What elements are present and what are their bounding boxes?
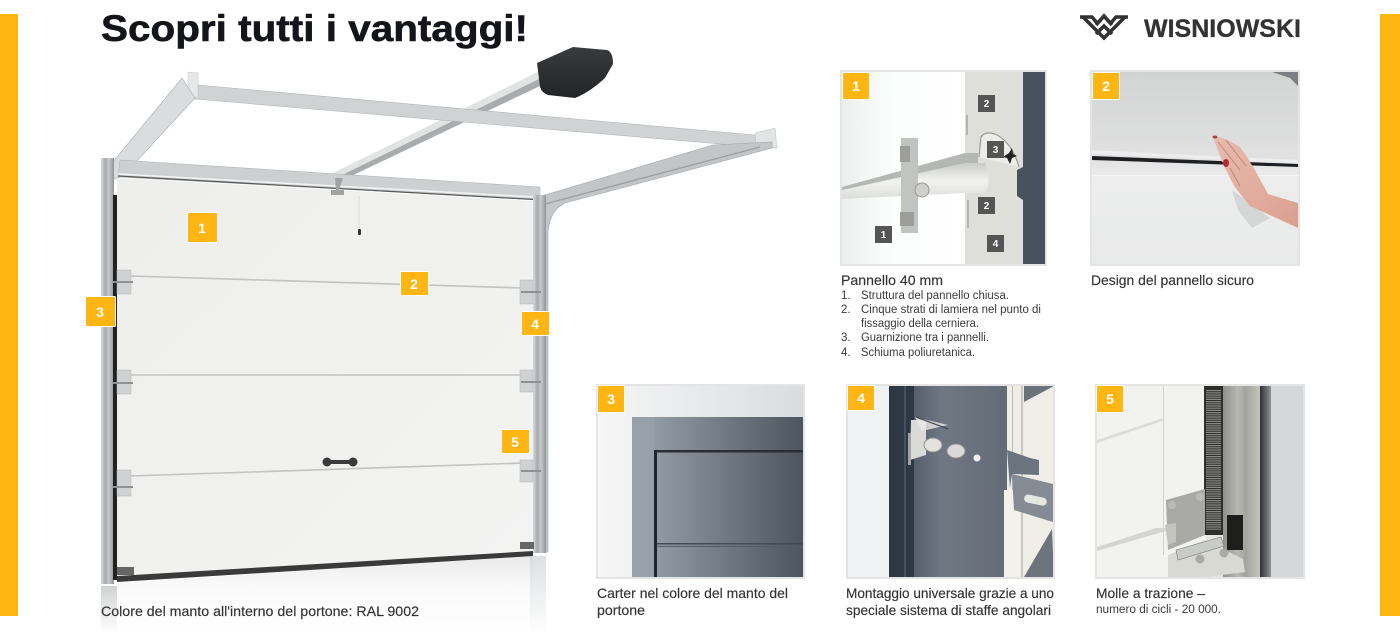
panel 4: universal mounting	[846, 384, 1055, 618]
badge 4 on door	[522, 312, 550, 336]
badge 5 on door	[502, 430, 530, 454]
caption	[1096, 585, 1221, 616]
label markers: 4	[993, 239, 999, 250]
badge 2 on door	[400, 272, 428, 296]
photo frame 1	[840, 70, 1047, 266]
numbered list: Cinque strati di lamiera nel punto di	[861, 304, 1041, 316]
left jamb	[101, 158, 114, 584]
numbered list: 4.	[841, 347, 851, 359]
panel 1: panel cross-section	[840, 70, 1047, 359]
title: Scopri tutti i vantaggi!	[101, 8, 528, 49]
panel 3: colour-matched cover	[596, 384, 805, 618]
caption: portone	[597, 602, 645, 618]
carriage	[331, 178, 344, 195]
badge 4: 4	[857, 390, 865, 406]
heading: Pannello 40 mm	[841, 272, 943, 288]
rear cross beam	[188, 72, 777, 148]
badge 1	[842, 72, 870, 100]
left horizontal track	[112, 78, 195, 180]
numbered list: fissaggio della cerniera.	[861, 318, 979, 330]
badge 4 on door: 4	[531, 316, 539, 332]
label markers: 2	[984, 99, 990, 110]
photo frame 4	[846, 384, 1055, 579]
numbered list	[841, 290, 1041, 359]
numbered list: 3.	[841, 332, 851, 344]
bracket photo	[847, 385, 1054, 577]
label markers: 1	[881, 230, 887, 241]
hinges	[117, 270, 533, 496]
spring photo	[1096, 385, 1305, 577]
label markers	[875, 95, 1004, 252]
right horizontal track	[538, 142, 772, 552]
garage door illustration	[101, 47, 777, 634]
badge 1: 1	[852, 78, 860, 94]
icon: W crown mark	[1080, 16, 1128, 38]
dark left seal	[113, 195, 117, 580]
badge 3 on door	[86, 296, 116, 326]
right accent bar	[1380, 14, 1400, 616]
badge 5 on door: 5	[511, 434, 519, 450]
hinge pins	[113, 281, 541, 488]
numbered list: 1.	[841, 290, 851, 302]
numbered list: Struttura del pannello chiusa.	[861, 290, 1009, 302]
caption: Montaggio universale grazie a uno	[846, 585, 1054, 601]
header frame	[118, 160, 540, 200]
badge 2	[1092, 72, 1120, 100]
badge 3 on door: 3	[96, 304, 104, 320]
door leaf	[117, 178, 533, 576]
badge 1 on door: 1	[198, 220, 206, 236]
badge 3	[598, 386, 624, 412]
badge 5	[1096, 386, 1124, 412]
caption: speciale sistema di staffe angolari	[846, 602, 1051, 618]
right jamb	[533, 195, 546, 553]
corner stops	[117, 542, 534, 575]
badge 3: 3	[607, 391, 615, 407]
badge 1 on door	[188, 212, 218, 242]
caption: numero di cicli - 20 000.	[1096, 604, 1221, 616]
numbered list: Schiuma poliuretanica.	[861, 347, 975, 359]
floor reflection	[101, 556, 546, 634]
logo: Wisniowski	[1080, 15, 1301, 43]
badge 2: 2	[1102, 78, 1110, 94]
door caption: Colore del manto all'interno del portone: RAL 9002	[101, 603, 419, 619]
panel 2: safe panel design	[1090, 70, 1300, 288]
central opener rail	[333, 72, 540, 180]
left accent bar	[0, 14, 18, 616]
caption: Design del pannello sicuro	[1091, 272, 1254, 288]
caption	[846, 585, 1054, 618]
photo frame 3	[596, 384, 805, 579]
handle	[322, 458, 358, 466]
label markers: 2	[984, 201, 990, 212]
numbered list: Guarnizione tra i pannelli.	[861, 332, 989, 344]
badge 2 on door: 2	[410, 276, 418, 292]
caption: Molle a trazione –	[1096, 585, 1205, 601]
panel 5: tension springs	[1095, 384, 1305, 616]
badge 5: 5	[1106, 391, 1114, 407]
badge 4	[848, 386, 874, 410]
numbered list: 2.	[841, 304, 851, 316]
caption	[597, 585, 788, 618]
cover photo	[597, 385, 804, 577]
cross-section illustration	[842, 72, 1046, 264]
label markers: 3	[993, 145, 999, 156]
wordmark: WISNIOWSKI	[1144, 15, 1301, 43]
release cord	[358, 196, 361, 235]
photo frame 2	[1090, 70, 1300, 266]
caption: Carter nel colore del manto del	[597, 585, 788, 601]
hand on panel photo	[1092, 72, 1298, 228]
bottom seal	[117, 551, 533, 582]
photo frame 5	[1095, 384, 1305, 579]
panel seams	[130, 276, 524, 476]
opener motor	[537, 47, 613, 98]
